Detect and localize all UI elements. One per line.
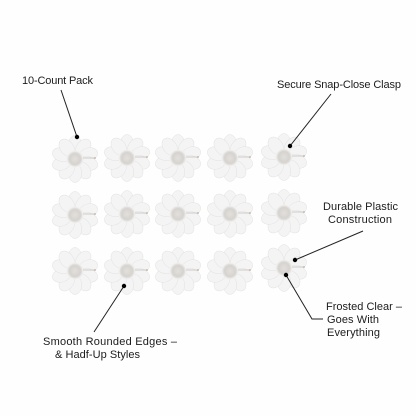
callout: Durable Plastic Construction: Construction (328, 214, 392, 226)
flower row 3 (51, 244, 308, 294)
flower row 2 (51, 190, 308, 238)
callout: Frosted Clear – Goes With Everything (284, 273, 403, 339)
callout: Secure Snap-Close Clasp (277, 79, 401, 148)
callout: Smooth Rounded Edges – & Hadf-Up Styles (43, 284, 178, 361)
callout: Frosted Clear – Goes With Everything: Goes With (327, 314, 379, 326)
callout: 10-Count Pack: 10-Count Pack (22, 75, 94, 87)
callout: Durable Plastic Construction: Durable Plastic (323, 201, 398, 213)
callout: Smooth Rounded Edges – & Hadf-Up Styles: & Hadf-Up Styles (55, 349, 140, 361)
callout: 10-Count Pack (22, 75, 94, 139)
flower row 1 (51, 134, 308, 182)
callout: Frosted Clear – Goes With Everything: Frosted Clear – (326, 301, 403, 313)
flower grid (51, 134, 308, 294)
callout: Durable Plastic Construction (293, 201, 398, 262)
callout: Secure Snap-Close Clasp: Secure Snap-Close Clasp (277, 79, 401, 91)
callout: Smooth Rounded Edges – & Hadf-Up Styles: Smooth Rounded Edges – (43, 336, 178, 348)
callout: Frosted Clear – Goes With Everything: Everything (327, 327, 380, 339)
